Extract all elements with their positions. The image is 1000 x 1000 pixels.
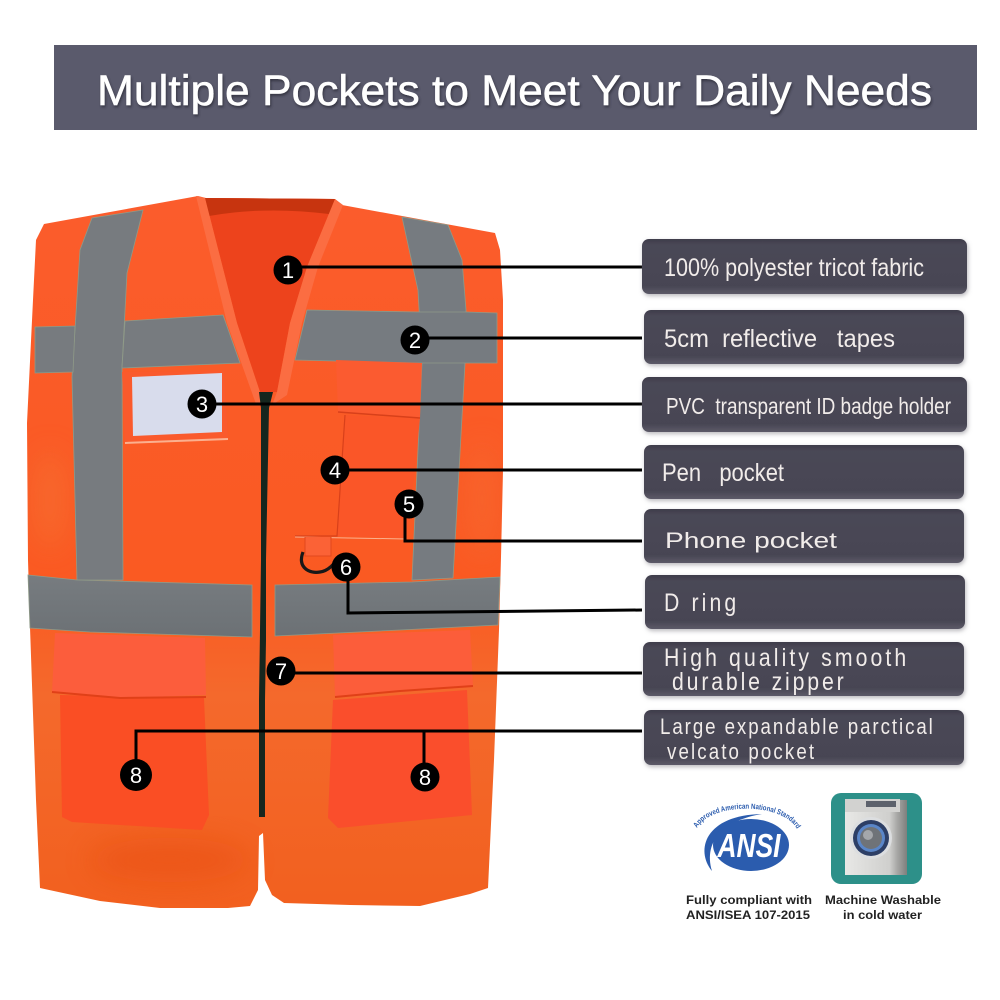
callout 1: 1 xyxy=(282,258,294,283)
right chest tape xyxy=(295,310,497,363)
label: D ring: D ring xyxy=(664,588,736,616)
label: pen pocket xyxy=(644,445,964,499)
title text: Multiple Pockets to Meet Your Daily Needs xyxy=(97,67,932,115)
callout 7: 7 xyxy=(275,659,287,684)
label: velcro pocket: velcato pocket xyxy=(667,741,814,764)
label: polyester fabric xyxy=(642,239,967,294)
label: velcro pocket xyxy=(644,710,964,765)
callout 6: 6 xyxy=(340,555,352,580)
lower left pocket xyxy=(52,633,209,830)
lower right pocket xyxy=(328,630,473,828)
caption: machine washable: in cold water xyxy=(843,908,922,922)
title banner xyxy=(54,45,977,130)
lower left waist tape xyxy=(28,575,252,637)
icon: washing machine xyxy=(831,793,922,884)
callout 7 xyxy=(266,656,296,686)
label: zipper: durable zipper xyxy=(672,667,844,695)
left vertical reflective tape xyxy=(72,210,143,580)
icon: ANSI logo: ANSI xyxy=(717,827,781,864)
pen pocket flap xyxy=(336,360,422,418)
zipper xyxy=(259,392,273,817)
ID badge holder xyxy=(122,371,228,444)
caption: machine washable xyxy=(825,893,941,922)
label: velcro pocket: Large expandable parctical xyxy=(660,716,933,739)
lower right waist tape xyxy=(275,577,500,636)
label: D ring xyxy=(645,575,965,629)
pen pocket body xyxy=(295,415,420,539)
callout 5 xyxy=(394,490,424,518)
callout 2 xyxy=(400,326,430,354)
callout 1 xyxy=(274,256,302,284)
callout 3 xyxy=(188,390,216,418)
leader lines xyxy=(136,267,642,777)
caption: machine washable: Machine Washable xyxy=(825,893,941,907)
callout 8 right: 8 xyxy=(419,765,431,790)
right pocket flap xyxy=(333,630,473,697)
vest body xyxy=(27,196,503,908)
neck opening lining xyxy=(205,198,335,392)
caption: ANSI compliance xyxy=(686,893,812,922)
icon: ANSI logo xyxy=(694,804,802,871)
callout 4 xyxy=(320,456,350,484)
orange safety vest xyxy=(27,196,503,908)
label: pen pocket: Pen pocket xyxy=(662,459,784,487)
label: phone pocket: Phone pocket xyxy=(665,528,837,553)
label: zipper xyxy=(643,642,964,696)
collar trim left xyxy=(196,196,262,404)
left pocket flap xyxy=(52,633,206,698)
label: reflective tapes xyxy=(644,310,964,364)
right vertical reflective tape xyxy=(402,217,466,580)
caption: ANSI compliance: Fully compliant with xyxy=(686,893,812,907)
D ring and tab xyxy=(301,537,339,572)
label: phone pocket xyxy=(644,509,964,563)
callout 8 right xyxy=(410,762,440,792)
label: polyester fabric: 100% polyester tricot fabric xyxy=(664,254,924,282)
collar trim right xyxy=(272,199,343,405)
callout 6 xyxy=(332,552,360,582)
caption: ANSI compliance: ANSI/ISEA 107-2015 xyxy=(686,908,810,922)
label: ID badge holder xyxy=(642,377,967,432)
callout 3: 3 xyxy=(196,392,208,417)
fabric shading xyxy=(36,440,496,882)
callout 2: 2 xyxy=(409,328,421,353)
label: reflective tapes: 5cm reflective tapes xyxy=(664,325,895,353)
callout 5: 5 xyxy=(403,492,415,517)
left chest tape inner xyxy=(122,315,240,368)
callout 8 left xyxy=(120,759,152,791)
callout 4: 4 xyxy=(329,458,341,483)
icon: ANSI logo: Approved American National Standard xyxy=(694,804,802,829)
label: zipper: High quality smooth xyxy=(664,643,906,671)
left chest tape outer xyxy=(35,326,75,373)
callout 8 left: 8 xyxy=(130,763,142,788)
